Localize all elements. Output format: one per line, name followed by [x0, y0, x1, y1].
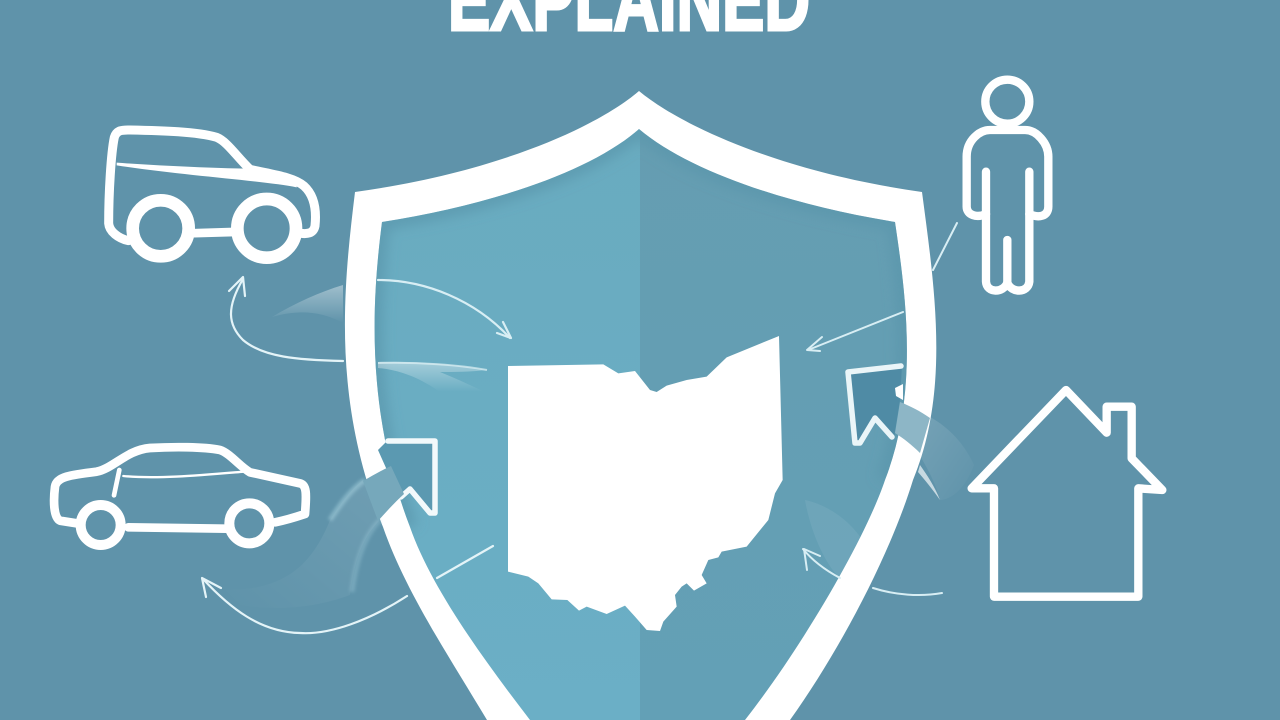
arrow line: inside shield lower left — [437, 546, 493, 578]
Ohio state silhouette — [508, 336, 783, 631]
swoosh: mid left — [378, 362, 487, 392]
swoosh: upper left — [272, 285, 343, 323]
arrow: right, from person — [807, 223, 957, 351]
icon: sedan — [54, 447, 306, 545]
arrow: to lower car — [202, 578, 407, 633]
arrow: into shield upper left — [378, 280, 511, 338]
large arrow outline: right — [848, 366, 901, 443]
shield — [345, 91, 936, 720]
translucent overlap on band — [363, 466, 404, 521]
icon: house — [972, 390, 1162, 597]
shield white border — [345, 91, 936, 720]
large arrow: right — [848, 365, 902, 443]
swoosh: lower left — [225, 466, 404, 608]
large arrow outline: lower left — [388, 441, 435, 513]
shield inner panel — [360, 125, 920, 720]
large arrow: lower left — [378, 441, 435, 513]
arrow: to upper car — [229, 277, 343, 361]
icon: person — [967, 80, 1048, 291]
icon: SUV — [109, 130, 315, 258]
swoosh: right — [895, 384, 974, 500]
arrow: lower right — [803, 500, 942, 595]
